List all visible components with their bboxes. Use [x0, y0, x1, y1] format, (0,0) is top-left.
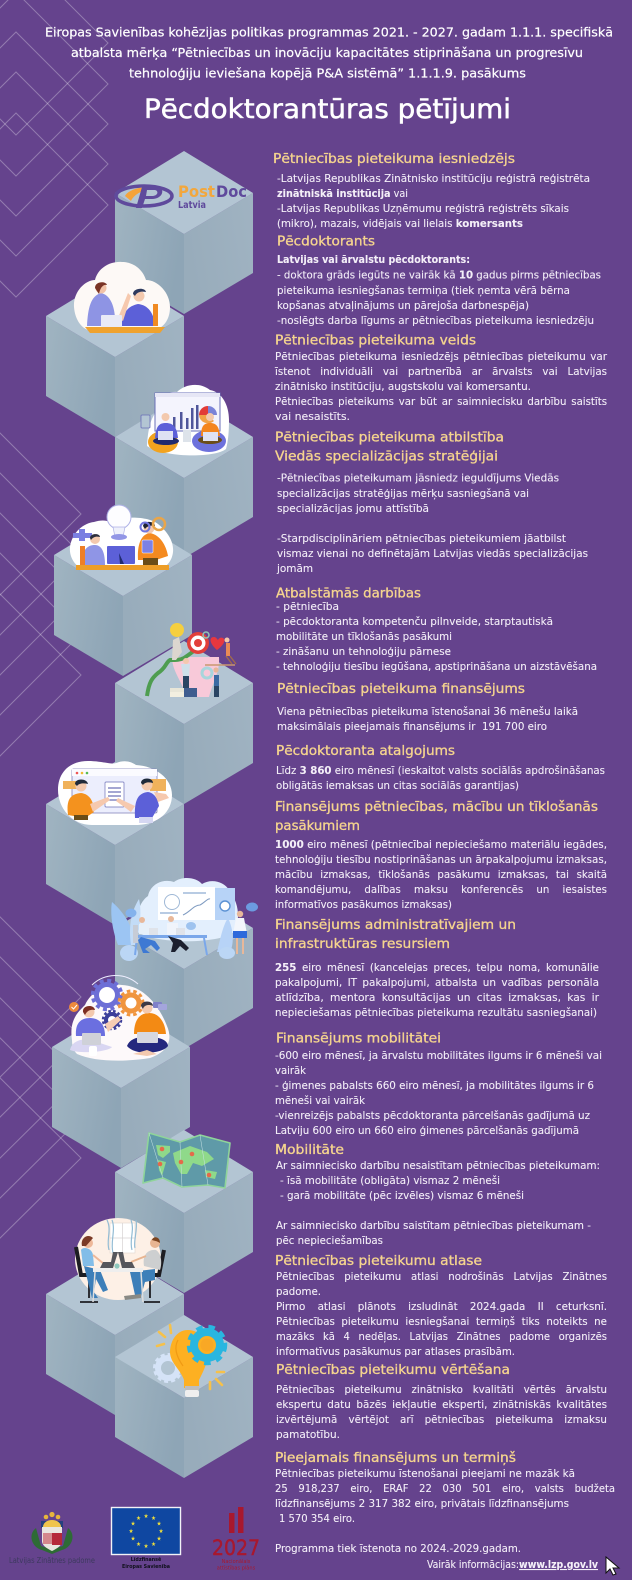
section: supported activities: - zināšanu un tehnoloģiju pārnese — [276, 646, 451, 658]
logo: EU co-funded: ★ — [144, 1543, 149, 1550]
logo: National Development Plan 2027: Nacionālais — [222, 1559, 251, 1565]
illustration: team with light bulb idea — [70, 505, 173, 570]
section: postdoc salary: obligātās iemaksas un citas sociālās garantijas) — [276, 780, 519, 792]
section: administrative funding: pakalpojumi, IT pakalpojumi, atbalsta un vadības personāla — [275, 977, 599, 989]
illustration: two colleagues at a laptop — [74, 262, 170, 333]
section: administrative funding — [275, 918, 599, 1019]
section: application evaluation: Pētniecības pieteikumu vērtēšana — [276, 1362, 510, 1378]
section: applicant: Pētniecības pieteikuma iesniedzējs — [273, 152, 515, 167]
section: supported activities: - pēcdoktoranta kompetenču pilnveide, starptautiskā — [276, 616, 553, 628]
title: Pēcdoktorantūras pētījumi — [144, 94, 511, 125]
logo: National Development Plan 2027: 2027 — [212, 1536, 260, 1560]
icon: mouse cursor — [606, 1557, 619, 1575]
section: mobility: Ar saimniecisko darbību nesaistītam pētniecības pieteikumam: — [276, 1160, 600, 1172]
logo: Latvian Council of Science: Latvijas Zinātnes padome — [9, 1556, 95, 1565]
section: supported activities: - tehnoloģiju tiesību iegūšana, apstiprināšana un aizstāvēšana — [276, 661, 597, 673]
section: mobility funding: Finansējums mobilitātei — [276, 1032, 441, 1047]
section: postdoc: - doktora grāds iegūts ne vairāk kā 10 gadus pirms pētniecības — [277, 270, 601, 282]
section: application selection: padome. — [276, 1286, 321, 1298]
logo: EU co-funded: ★ — [131, 1536, 136, 1542]
section: mobility funding: mēneši vai vairāk — [275, 1095, 366, 1107]
illustration: team climbing toward a target — [147, 623, 236, 697]
section: application selection: Pētniecības pieteikumu iesniegšanai termiņš tiks noteikts ne — [276, 1316, 607, 1328]
section: applicant: -Latvijas Republikas Zinātnisko institūciju reģistrā reģistrēta — [277, 173, 590, 185]
section: administrative funding: infrastruktūras resursiem — [275, 937, 450, 952]
section: funding per application — [277, 682, 578, 733]
section: application selection: informatīvus pasākumus par atlases prasībām. — [276, 1346, 515, 1358]
section: application selection — [275, 1254, 607, 1358]
section: application selection: Pētniecības pieteikumu atlasi nodrošinās Latvijas Zinātnes — [276, 1271, 607, 1283]
logo: EU co-funded: ★ — [136, 1541, 141, 1548]
section: application type: Pētniecības pieteikuma veids — [275, 334, 476, 349]
section: research and training funding — [275, 799, 607, 911]
section: application evaluation: pamatotību. — [276, 1429, 340, 1441]
section: mobility funding: vairāk — [275, 1065, 307, 1077]
section: administrative funding: nepieciešamas pētniecības pieteikuma rezultātu sasniegšanai) — [275, 1007, 597, 1019]
icon: PostDoc Latvia logo: Post — [178, 182, 215, 201]
section: application selection: Pētniecības pieteikumu atlase — [275, 1254, 482, 1269]
section: application evaluation: ekspertu datu bāzēs iekļautie eksperti, zinātniskās kvalitātes — [276, 1399, 607, 1411]
logo: EU co-funded: ★ — [157, 1536, 162, 1542]
logo: EU co-funded: Līdzfinansē — [131, 1557, 161, 1563]
illustration: data analysts with charts — [141, 385, 229, 455]
section: available funding and term: Programma tiek īstenota no 2024.-2029.gadam. — [275, 1543, 521, 1555]
section: available funding and term: Pētniecības pieteikumu īstenošanai pieejami ne mazāk kā — [275, 1468, 575, 1480]
section: available funding and term — [275, 1450, 615, 1555]
section: available funding and term: līdzfinansējums 2 317 382 eiro, privātais līdzfinansējums — [275, 1498, 569, 1510]
logo: National Development Plan 2027: attīstības plāns — [217, 1566, 256, 1572]
section: applicant — [273, 152, 590, 230]
section: smart specialisation fit: vismaz vienai no definētajām Latvijas viedās specializācijas — [277, 548, 588, 560]
section: postdoc salary: Pēcdoktoranta atalgojums — [276, 744, 455, 759]
section: funding per application: maksimālais pieejamais finansējums ir 191 700 eiro — [277, 721, 547, 733]
section: application evaluation: izvērtējumā vērtējot arī pētniecības pieteikuma izmaksu — [276, 1414, 607, 1426]
heading: programme subtitle: atbalsta mērķa “Pētniecības un inovāciju kapacitātes stiprināšana un progresīvu — [71, 45, 583, 60]
section: available funding and term: 1 570 354 eiro. — [279, 1513, 355, 1525]
section: postdoc: Pēcdoktorants — [277, 234, 375, 250]
section: postdoc salary: Līdz 3 860 eiro mēnesī (ieskaitot valsts sociālās apdrošināšanas — [276, 765, 605, 777]
heading: programme subtitle: tehnoloģiju ieviešana kopējā P&A sistēmā” 1.1.1.9. pasākums — [129, 66, 526, 80]
isometric staircase of cubes — [46, 151, 253, 1478]
section: smart specialisation fit — [275, 431, 588, 575]
heading: programme subtitle — [45, 24, 613, 80]
section: research and training funding: 1000 eiro mēnesī (pētniecībai nepieciešamo materiālu iegādes, — [275, 839, 607, 851]
illustration: collaborators with gears — [69, 976, 169, 1061]
section: smart specialisation fit: jomām — [276, 563, 313, 575]
section: postdoc: Latvijas vai ārvalstu pēcdoktorants: — [277, 254, 470, 266]
section: available funding and term: Pieejamais finansējums un termiņš — [275, 1450, 516, 1466]
section: application type: vai nesaistīts. — [275, 411, 350, 423]
section: mobility funding: -vienreizējs pabalsts pēcdoktoranta pārcelšanās gadījumā uz — [275, 1110, 590, 1122]
section: smart specialisation fit: Viedās specializācijas stratēģijai — [275, 450, 498, 465]
section: research and training funding: komandējumu, dalības maksu konferencēs un iesaistes — [275, 884, 607, 896]
section: mobility — [275, 1143, 600, 1247]
more information link: Vairāk informācijas:www.lzp.gov.lv — [427, 1559, 598, 1571]
section: supported activities: Atbalstāmās darbības — [276, 587, 421, 602]
logo: EU co-funded: ★ — [151, 1541, 156, 1548]
section: administrative funding: atlīdzība, mentora konsultācijas un citas izmaksas, kas ir — [275, 992, 599, 1004]
section: application selection: mazāks kā 4 nedēļas. Latvijas Zinātnes padome organizēs — [276, 1331, 607, 1343]
section: smart specialisation fit: Pētniecības pieteikuma atbilstība — [275, 431, 504, 446]
logo: EU co-funded: ★ — [129, 1528, 134, 1535]
logo: EU co-funded: ★ — [151, 1515, 156, 1522]
section: smart specialisation fit: -Starpdisciplināriem pētniecības pieteikumiem jāatbilst — [277, 533, 566, 545]
heading: programme subtitle: Eiropas Savienības kohēzijas politikas programmas 2021. - 2027. gadam 1.1.1. specifiskā — [45, 24, 613, 40]
section: mobility funding — [275, 1032, 602, 1137]
illustration: world map with pins — [143, 1133, 230, 1188]
section: supported activities — [276, 587, 597, 673]
section: mobility: pēc nepieciešamības — [276, 1235, 383, 1247]
section: application type: zinātnisko institūciju, augstskolu vai komersantu. — [275, 381, 531, 393]
section: application type: Pētniecības pieteikuma iesniedzējs pētniecības pieteikumu var — [275, 351, 607, 363]
logo: EU co-funded: ★ — [131, 1520, 136, 1528]
section: administrative funding: 255 eiro mēnesī (kancelejas preces, telpu noma, komunālie — [275, 962, 599, 974]
logo: Latvian Council of Science — [9, 1512, 95, 1565]
section: postdoc: pieteikuma iesniegšanas termiņa (tiek ņemta vērā bērna — [277, 285, 570, 297]
section: application type: Pētniecības pieteikums var būt ar saimniecisku darbību saistīts — [275, 396, 607, 408]
section: funding per application: Pētniecības pieteikuma finansējums — [277, 682, 525, 697]
section: funding per application: Viena pētniecības pieteikuma īstenošanai 36 mēnešu laikā — [277, 706, 578, 718]
section: postdoc salary — [276, 744, 605, 792]
section: supported activities: - pētniecība — [276, 601, 339, 613]
section: mobility: - garā mobilitāte (pēc izvēles) vismaz 6 mēneši — [280, 1190, 524, 1202]
logo: EU co-funded: ★ — [144, 1513, 149, 1520]
section: research and training funding: mācību izmaksas, tīklošanās pasākumu izmaksas, tai skaitā — [275, 869, 607, 881]
section: supported activities: mobilitāte un tīklošanās pasākumi — [276, 631, 452, 643]
section: application evaluation: Pētniecības pieteikumu zinātnisko kvalitāti vērtēs ārvalstu — [276, 1384, 607, 1396]
section: research and training funding: tehnoloģiju tiesību nostiprināšanas un ārpakalpojumu izmaksas, — [275, 854, 607, 866]
icon: PostDoc Latvia logo — [116, 182, 247, 211]
logo: EU co-funded: ★ — [157, 1520, 162, 1528]
section: mobility funding: -600 eiro mēnesī, ja ārvalstu mobilitātes ilgums ir 6 mēneši vai — [275, 1050, 602, 1062]
section: applicant: zinātniskā institūcija vai — [277, 188, 408, 200]
section: smart specialisation fit: -Pētniecības pieteikumam jāsniedz ieguldījums Viedās — [277, 473, 559, 485]
section: research and training funding: Finansējums pētniecības, mācību un tīklošanās — [275, 799, 598, 815]
section: application type — [274, 334, 607, 423]
section: research and training funding: informatīvos pasākumos izmaksas) — [275, 899, 452, 911]
section: postdoc: kopšanas atvaļinājums un pārejoša darbnespēja) — [277, 300, 529, 312]
section: application selection: Pirmo atlasi plānots izsludināt 2024.gada II ceturksnī. — [276, 1301, 607, 1313]
section: mobility: Mobilitāte — [275, 1143, 344, 1158]
section: research and training funding: pasākumiem — [275, 819, 360, 834]
section: postdoc: -noslēgts darba līgums ar pētniecības pieteikuma iesniedzēju — [277, 315, 594, 327]
section: smart specialisation fit: specializācijas jomu attīstībā — [277, 503, 429, 515]
section: smart specialisation fit: specializācijas stratēģijas mērķu sasniegšanā vai — [277, 488, 529, 500]
section: mobility: - īsā mobilitāte (obligāta) vismaz 2 mēneši — [280, 1175, 500, 1187]
section: applicant: -Latvijas Republikas Uzņēmumu reģistrā reģistrēts sīkais — [277, 203, 569, 215]
illustration: two researchers at a table — [75, 1218, 164, 1302]
logo: EU co-funded — [112, 1508, 180, 1570]
section: application evaluation — [276, 1362, 607, 1441]
logo: National Development Plan 2027 — [212, 1507, 260, 1572]
section: applicant: (mikro), mazais, vidējais vai lielais komersants — [277, 218, 524, 230]
illustration: light bulb with gears — [154, 1325, 225, 1397]
illustration: two people reviewing a document — [58, 761, 172, 825]
illustration: meeting with presentation board — [111, 878, 258, 961]
section: mobility funding: Latviju 600 eiro un 660 eiro ģimenes pārcelšanās gadījumā — [275, 1125, 579, 1137]
logo: EU co-funded: ★ — [136, 1515, 141, 1522]
section: available funding and term: 25 918,237 eiro, ERAF 22 030 501 eiro, valsts budžeta — [275, 1483, 615, 1495]
icon: PostDoc Latvia logo: Latvia — [178, 200, 206, 211]
section: administrative funding: Finansējums administratīvajiem un — [275, 918, 516, 933]
section: postdoc — [277, 234, 601, 327]
section: mobility: Ar saimniecisko darbību saistītam pētniecības pieteikumam - — [276, 1220, 591, 1232]
section: mobility funding: - ģimenes pabalsts 660 eiro mēnesī, ja mobilitātes ilgums ir 6 — [275, 1080, 594, 1092]
icon: PostDoc Latvia logo: Doc — [216, 182, 247, 201]
logo: EU co-funded: Eiropas Savienība — [122, 1564, 170, 1570]
section: application type: īstenot individuāli vai partnerībā ar ārvalsts vai Latvijas — [274, 366, 607, 378]
logo: EU co-funded: ★ — [159, 1528, 164, 1535]
